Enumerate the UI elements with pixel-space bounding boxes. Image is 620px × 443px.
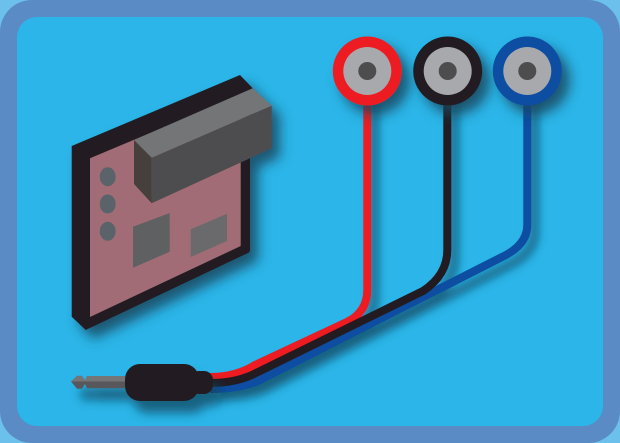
board backing [72, 75, 253, 330]
electrode: black [413, 36, 482, 106]
chip: small [191, 214, 227, 257]
wire: black [210, 90, 447, 383]
jack metal tip lower half [71, 382, 125, 389]
jack body [125, 364, 199, 401]
connector front face [152, 106, 272, 203]
jack collar [190, 371, 213, 394]
wire: red [210, 90, 367, 377]
circuit board [72, 75, 272, 330]
electrode: red [333, 36, 402, 106]
wires [210, 90, 527, 389]
connector side face [134, 140, 152, 203]
electrode: blue [493, 36, 562, 106]
chip: large [133, 213, 170, 268]
connector top face [134, 88, 272, 158]
indicator dots [100, 167, 116, 241]
wire: blue [210, 90, 527, 389]
board pink surface [90, 95, 241, 317]
connector block [134, 88, 272, 203]
audio jack plug [71, 364, 213, 401]
jack metal tip [71, 376, 125, 382]
